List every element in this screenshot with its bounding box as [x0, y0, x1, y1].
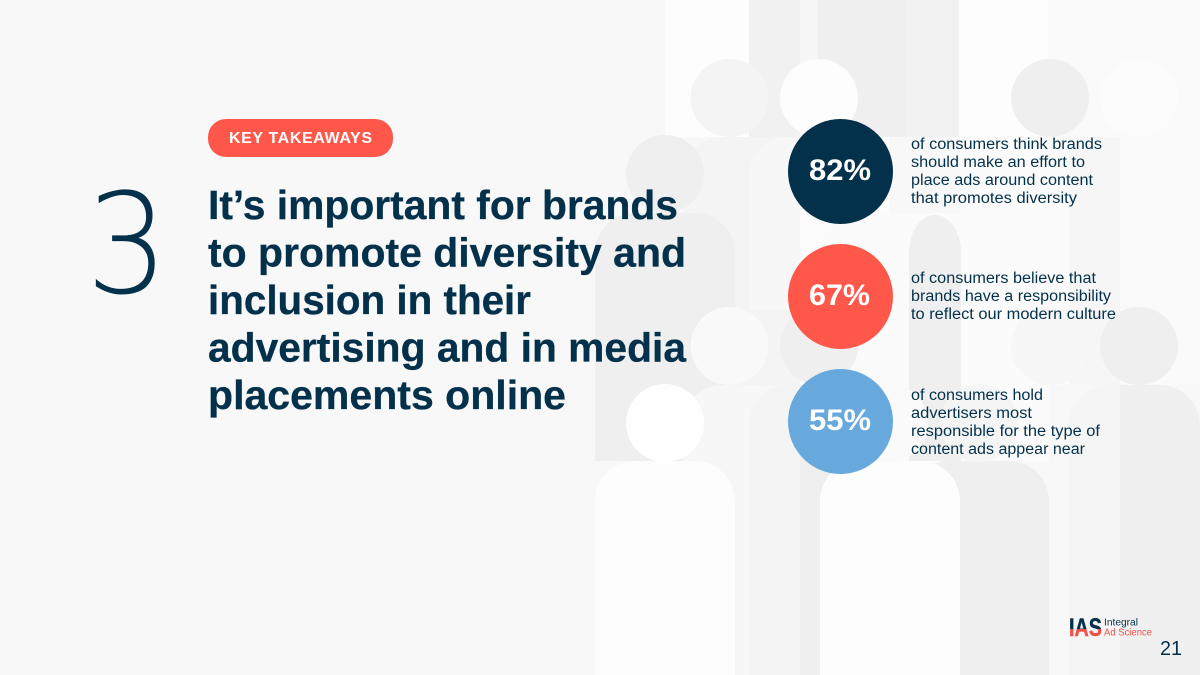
stat: 82% [788, 119, 1102, 224]
crowd of people silhouettes [595, 0, 1200, 675]
IAS logo [1069, 614, 1152, 642]
stat: 82%: 82% [809, 154, 871, 187]
key takeaways pill: KEY TAKEAWAYS [229, 130, 372, 147]
title: inclusion in their [208, 277, 531, 323]
stat: 67%: brands have a responsibility [911, 288, 1111, 305]
stat: 55%: advertisers most [911, 405, 1033, 422]
title: It’s important for brands [208, 182, 678, 228]
key takeaways pill [208, 119, 393, 157]
stat: 82%: place ads around content [911, 172, 1094, 189]
stat: 82%: should make an effort to [911, 154, 1085, 171]
stat: 82%: of consumers think brands [911, 136, 1102, 153]
stat: 67% [788, 244, 1116, 349]
stat: 55%: of consumers hold [911, 387, 1043, 404]
stat: 67%: to reflect our modern culture [911, 306, 1116, 323]
title: advertising and in media [208, 324, 687, 370]
stat: 67%: of consumers believe that [911, 270, 1097, 287]
row D [909, 461, 1049, 675]
row C [749, 385, 889, 675]
row A [683, 137, 800, 461]
stat: 55%: content ads appear near [911, 441, 1085, 458]
stat: 67%: 67% [809, 279, 870, 312]
stat: 55%: 55% [809, 404, 871, 437]
IAS logo: Ad Science [1104, 628, 1152, 638]
stat: 55% [788, 369, 1101, 474]
page number: 21 [1160, 638, 1182, 660]
IAS logo: Integral [1104, 618, 1138, 628]
big number 3: 3 [86, 163, 168, 326]
stat: 82%: that promotes diversity [911, 190, 1077, 207]
title: placements online [208, 372, 566, 418]
row B [595, 213, 735, 461]
IAS logo: IAS [1069, 614, 1102, 642]
stat: 55%: responsible for the type of [911, 423, 1101, 440]
title: to promote diversity and [208, 230, 686, 276]
title [208, 182, 687, 418]
